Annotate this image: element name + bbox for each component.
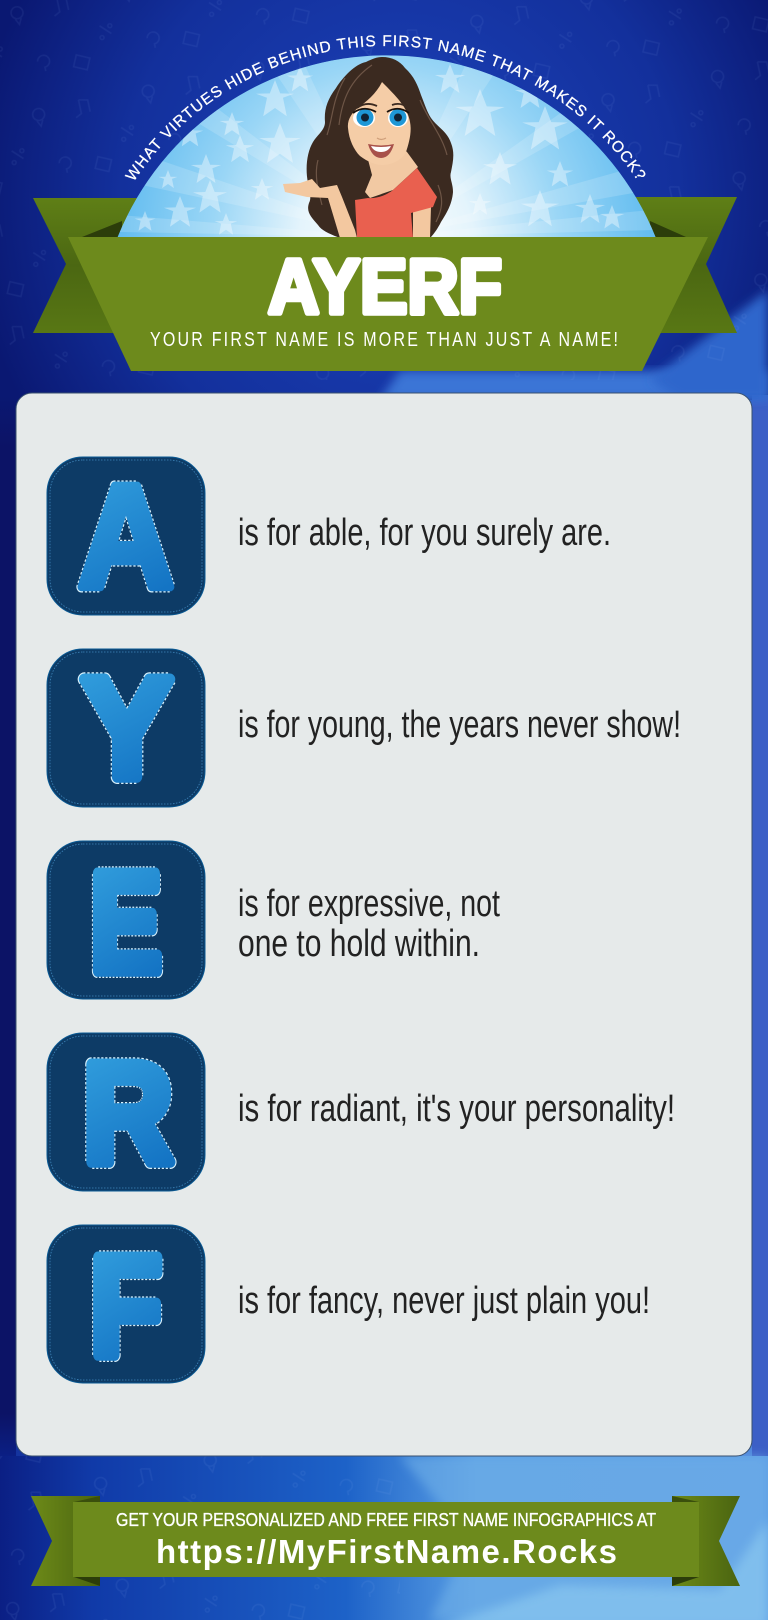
badge F: F <box>90 1227 162 1386</box>
badge R: R <box>83 1034 173 1193</box>
text A: is for able, for you surely are. <box>238 512 611 554</box>
hair <box>307 57 453 238</box>
neck and chest <box>365 148 418 198</box>
row Y <box>47 649 681 808</box>
sunburst dome <box>118 55 656 237</box>
curved tagline: WHAT VIRTUES HIDE BEHIND THIS FIRST NAME THAT MAKES IT ROCK? <box>124 35 646 180</box>
footer banner <box>31 1496 740 1586</box>
main banner <box>68 237 708 371</box>
right arm <box>413 207 431 238</box>
subtitle: YOUR FIRST NAME IS MORE THAN JUST A NAME! <box>150 328 618 350</box>
row A <box>47 455 611 619</box>
ribbon tails <box>33 197 737 333</box>
row F <box>47 1225 650 1386</box>
text E: is for expressive, not <box>238 883 500 925</box>
text E: one to hold within. <box>238 923 480 965</box>
left arm and hand <box>283 179 357 238</box>
face <box>348 82 411 165</box>
badge R <box>47 1033 205 1193</box>
illustrated woman <box>283 57 453 238</box>
badge A <box>47 455 205 619</box>
nose <box>377 138 386 140</box>
eyes <box>353 104 409 127</box>
header <box>33 35 737 371</box>
badge Y: Y <box>82 649 172 808</box>
smile <box>368 144 394 158</box>
text F: is for fancy, never just plain you! <box>238 1280 650 1322</box>
badge E <box>47 841 205 1002</box>
panel: letters <box>16 393 752 1456</box>
footer call to action: GET YOUR PERSONALIZED AND FREE FIRST NAME INFOGRAPHICS AT <box>116 1510 656 1530</box>
footer ribbon tails <box>31 1496 740 1586</box>
shirt <box>355 168 437 238</box>
footer ribbon <box>73 1502 699 1577</box>
row R <box>47 1033 675 1193</box>
badge Y <box>47 649 205 808</box>
footer url: https://MyFirstName.Rocks <box>156 1533 617 1570</box>
panel background <box>16 393 752 1456</box>
row E <box>47 841 500 1002</box>
hair highlights <box>316 65 447 222</box>
badge F <box>47 1225 205 1386</box>
name title: AYERF <box>268 244 502 330</box>
badge E: E <box>90 843 162 1002</box>
badge A: A <box>78 455 174 619</box>
